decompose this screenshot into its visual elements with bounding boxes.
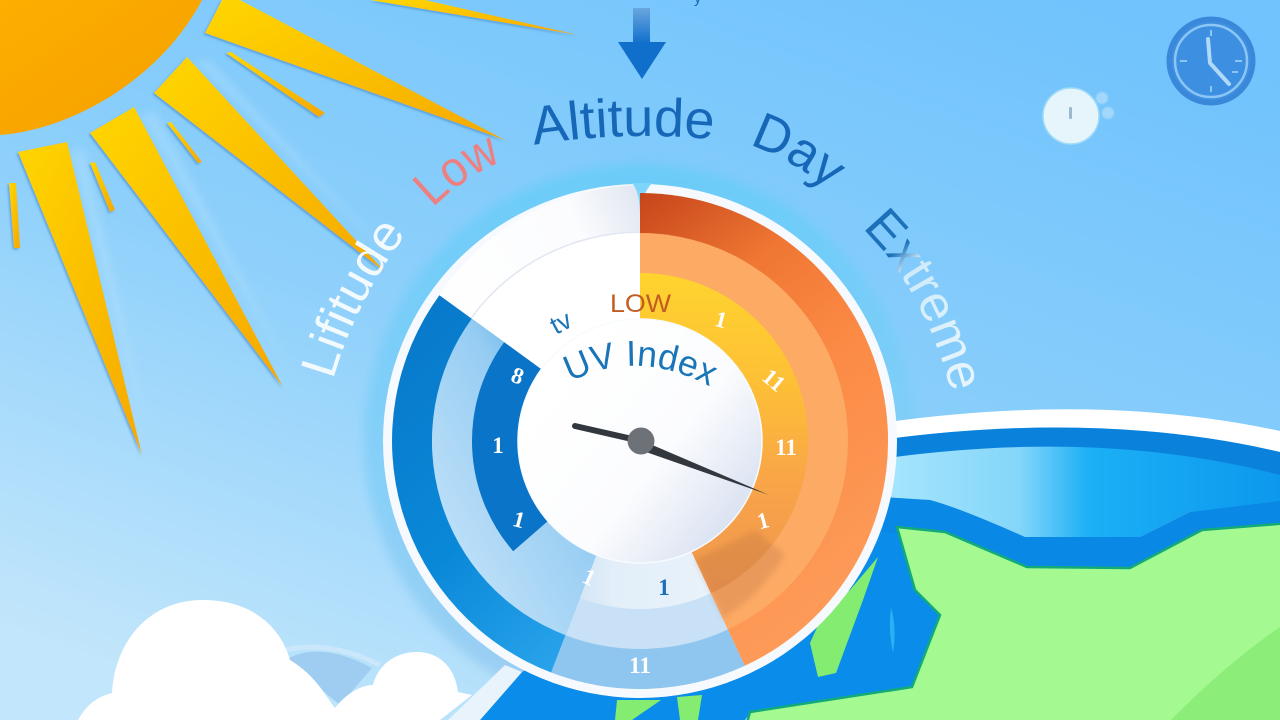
centre disc <box>518 319 762 563</box>
scale numbers: 11 <box>757 364 790 397</box>
outer white rim <box>383 184 897 698</box>
bottom islands <box>615 700 661 720</box>
green island <box>810 557 878 677</box>
darker land corner <box>1171 627 1280 720</box>
small UV label: tv <box>545 304 577 340</box>
scale numbers: 1 <box>510 506 528 533</box>
scale numbers: 1 <box>492 433 504 458</box>
scale numbers <box>492 306 797 678</box>
ocean light area <box>880 447 1280 537</box>
scale numbers: 1 <box>712 306 730 333</box>
scale numbers: 1 <box>658 575 670 600</box>
small rays <box>9 52 325 248</box>
bottom pale sector <box>513 441 745 689</box>
coastal blue water <box>480 470 945 720</box>
large rays <box>18 0 578 455</box>
scale numbers: 1 <box>754 507 772 534</box>
scale numbers: 11 <box>775 435 797 460</box>
downward arrow <box>618 8 666 79</box>
ray glow streaks <box>70 60 395 440</box>
Extreme label: Extreme <box>865 208 974 388</box>
inner labels <box>545 290 718 386</box>
gauge halo <box>364 164 916 716</box>
sun disc <box>0 0 202 135</box>
main green land <box>745 523 1280 720</box>
Low label: Low <box>412 137 496 206</box>
sun with rays <box>0 0 578 455</box>
scale numbers: 1 <box>579 563 600 591</box>
Day label: Day <box>753 112 846 188</box>
UV gauge dial <box>383 183 897 698</box>
Altitude label: Altitude <box>534 98 712 145</box>
blue sector <box>392 295 640 672</box>
lower orange shading <box>695 530 785 618</box>
earth: land and sea <box>448 409 1280 720</box>
LOW label: LOW <box>610 290 671 318</box>
bright shoreline strip <box>448 665 522 720</box>
orange sector <box>640 193 888 666</box>
top-left white sector <box>439 185 640 441</box>
clock icon <box>1169 19 1253 103</box>
atmosphere white band <box>880 409 1280 452</box>
cloud <box>78 600 472 720</box>
notch at top <box>632 183 652 216</box>
ocean coastal band <box>880 497 1280 575</box>
left white label: Lifitude <box>301 224 402 376</box>
small white dial <box>1043 88 1114 144</box>
scale numbers: 8 <box>508 362 527 390</box>
UV Index label: UV Index <box>562 341 718 386</box>
scale numbers: 11 <box>629 653 651 678</box>
water highlight <box>890 607 895 653</box>
needle <box>575 426 769 495</box>
ocean dark stripe <box>880 428 1280 480</box>
curved labels around gauge <box>301 98 974 388</box>
